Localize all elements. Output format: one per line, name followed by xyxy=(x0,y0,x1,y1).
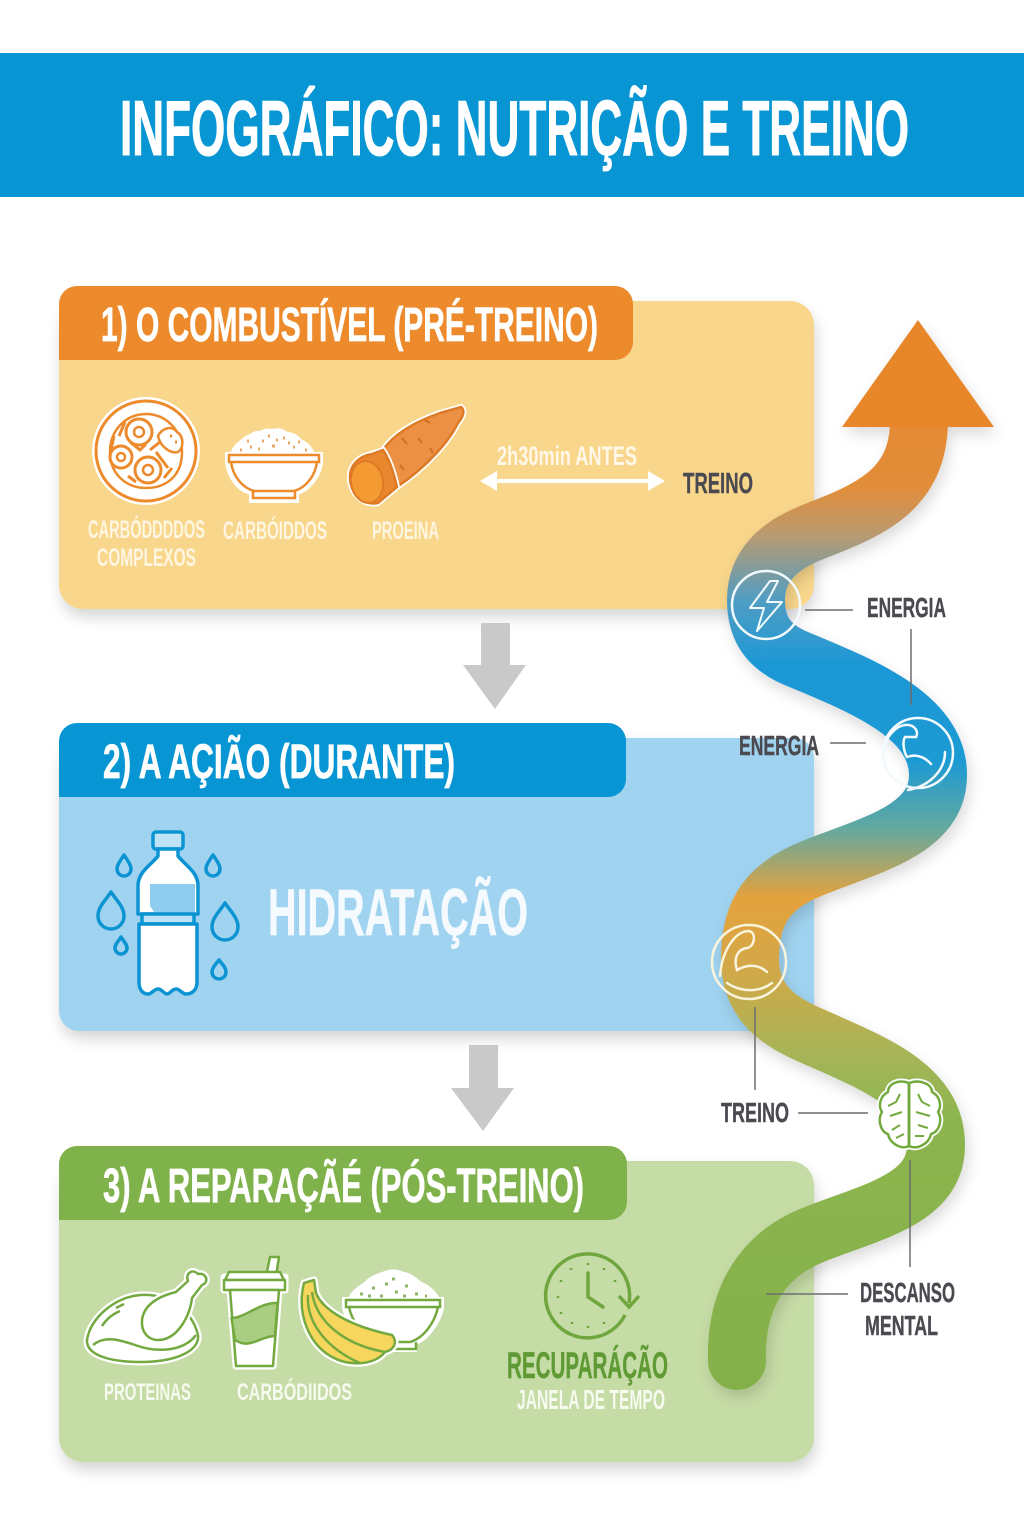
panel: during workout xyxy=(59,723,814,1031)
header banner xyxy=(0,53,1024,197)
label: mental rest: MENTAL xyxy=(865,1310,938,1341)
label: mental rest: DESCANSO xyxy=(860,1277,955,1308)
callout: workout muscle xyxy=(712,925,786,999)
label: protein: PROEINA xyxy=(372,517,439,545)
panel: post-workout xyxy=(59,1146,814,1462)
leader lines xyxy=(755,610,911,1294)
icon: water bottle with drops xyxy=(98,832,238,994)
heading: post-workout xyxy=(59,1146,627,1220)
heading: during workout xyxy=(59,723,626,797)
arrow: double-headed timing xyxy=(480,471,665,491)
icon: rice bowl xyxy=(345,1272,441,1349)
label: workout: TREINO xyxy=(683,468,753,500)
callout: energy bolt xyxy=(732,571,800,639)
heading: pre-workout: 1) O COMBUSTÍVEL (PRÉ-TREINO) xyxy=(101,298,598,352)
icon: rice bowl xyxy=(228,430,320,500)
label: complex carbs xyxy=(88,514,205,572)
label: complex carbs: COMPLEXOS xyxy=(97,544,196,572)
label: complex carbs: CARBÓDDDDOS xyxy=(88,514,205,544)
heading: post-workout: 3) A REPARAÇÃÉ (PÓS-TREINO) xyxy=(103,1158,584,1213)
label: proteins: PROTEINAS xyxy=(104,1379,191,1406)
icon: chicken xyxy=(87,1272,206,1362)
label: carbs: CARBÓIDDOS xyxy=(223,515,327,545)
label: carbs: CARBÓDIIDOS xyxy=(237,1378,352,1406)
icon: plate of pasta xyxy=(92,397,200,505)
label: energy upper: ENERGIA xyxy=(867,592,946,623)
heading: pre-workout xyxy=(59,286,633,360)
heading: during workout: 2) A AÇIÃO (DURANTE) xyxy=(103,734,455,789)
icon: smoothie cup xyxy=(224,1257,285,1366)
label: energy lower: ENERGIA xyxy=(739,730,819,761)
icon: bananas xyxy=(302,1280,395,1363)
text: hydration: HIDRATAÇÃO xyxy=(268,875,528,949)
icon: recovery clock xyxy=(546,1254,639,1338)
text: recovery: RECUPARÁÇÃO xyxy=(507,1344,668,1386)
arrow: gradient journey ribbon xyxy=(737,320,994,1361)
timing label: 2h30min ANTES xyxy=(497,441,637,471)
arrow: down to step 3 xyxy=(451,1045,514,1131)
callout: brain xyxy=(880,1082,940,1147)
panel: pre-workout xyxy=(59,286,814,609)
label: workout: TREINO xyxy=(721,1097,789,1128)
label: mental rest xyxy=(860,1277,955,1341)
text: time window: JANELA DE TEMPO xyxy=(517,1384,665,1415)
icon: sweet potato xyxy=(348,407,463,505)
arrow: down to step 2 xyxy=(463,623,526,709)
callout: energy muscle xyxy=(883,718,953,790)
